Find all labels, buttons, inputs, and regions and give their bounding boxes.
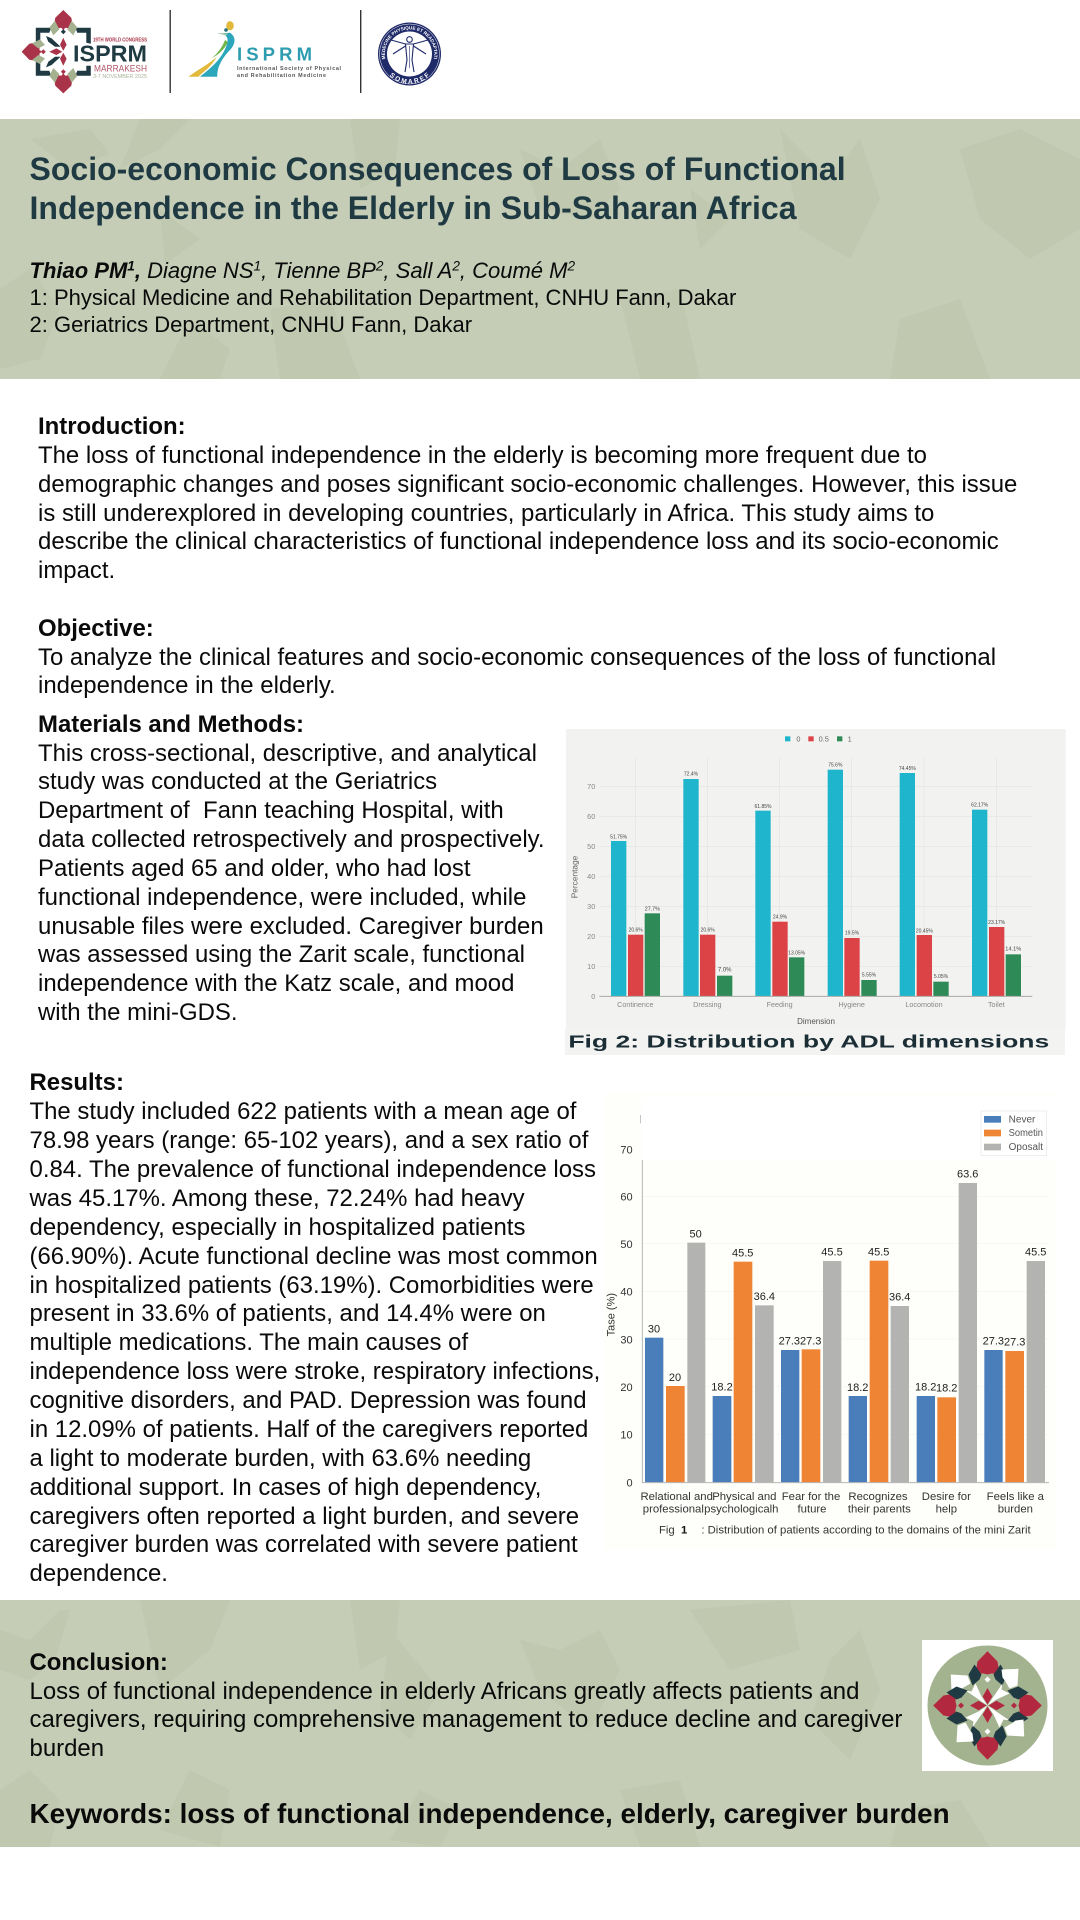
text block: conclusion: caregivers, requiring comprehensive management to reduce decline and caregiver	[30, 1706, 902, 1733]
category labels: Desire for	[922, 1491, 971, 1503]
bars: never	[645, 1338, 1003, 1482]
category labels: future	[798, 1504, 826, 1516]
y axis ticks: 20	[620, 1382, 633, 1394]
bar value labels: 18.2	[915, 1382, 936, 1394]
category labels: burden	[998, 1504, 1033, 1516]
bar value labels: 27.3	[1004, 1336, 1025, 1348]
bar value labels: 20	[669, 1372, 681, 1384]
text block: conclusion: Loss of functional independence in elderly Africans greatly affects patients and	[30, 1678, 859, 1705]
congress wordmark: ISPRM	[73, 41, 147, 67]
ISPRM society wordmark: ISPRM	[237, 44, 312, 65]
x axis title: Dimension	[797, 1017, 835, 1026]
chart: Fig 1 mini Zarit domains	[605, 1110, 1049, 1536]
y axis ticks: 0	[627, 1477, 633, 1489]
bar value labels: 19.5%	[845, 930, 860, 936]
category labels: professional	[643, 1504, 704, 1516]
text block: results: (66.90%). Acute functional decline was most common	[30, 1243, 598, 1270]
bar value labels: 27.7%	[645, 906, 660, 912]
x axis labels: Feeding	[767, 1000, 793, 1009]
text block: conclusion: Conclusion:	[30, 1649, 168, 1676]
bar value labels: 18.2	[847, 1382, 868, 1394]
bar value labels: 20.6%	[701, 928, 715, 934]
figure 1 caption: Fig	[659, 1524, 675, 1536]
authors and affiliations: 2: Geriatrics Department, CNHU Fann, Dakar	[30, 312, 472, 337]
text block: introduction: Introduction:	[38, 413, 186, 440]
title: Socio-economic Consequences of Loss of Functional	[30, 151, 846, 187]
text block: materials and methods: data collected retrospectively and prospectively.	[38, 826, 544, 853]
text block: introduction: The loss of functional independence in the elderly is becoming more frequent due to	[38, 442, 927, 469]
y axis ticks: 50	[620, 1239, 633, 1251]
text block: results: present in 33.6% of patients, and 14.4% were on	[30, 1300, 546, 1327]
bar value labels: 27.3	[800, 1335, 821, 1347]
bars: score 0	[611, 770, 987, 996]
text block: results	[30, 1069, 600, 1587]
text block: results: in 12.09% of patients. Half of the caregivers reported	[30, 1416, 588, 1443]
text block: results: a light to moderate burden, with 63.6% needing	[30, 1445, 531, 1472]
legend: 1	[848, 734, 852, 743]
bar value labels: 18.2	[711, 1382, 733, 1394]
text block: introduction	[38, 413, 1017, 584]
icon: SOMAREF seal	[378, 22, 441, 86]
y axis	[587, 782, 595, 1001]
category labels: help	[936, 1504, 957, 1516]
y axis title: Tase (%)	[605, 1293, 617, 1336]
text block: introduction: is still underexplored in developing countries, particularly in Africa. This study aims to	[38, 500, 934, 527]
bar value labels: 36.4	[889, 1292, 910, 1304]
panel: conclusion band	[0, 1600, 1080, 1847]
ISPRM society wordmark	[237, 44, 342, 79]
figure 1 caption: : Distribution of patients according to the domains of the mini Zarit	[701, 1524, 1031, 1536]
text block: results: dependence.	[30, 1560, 168, 1587]
bar value labels: 30	[648, 1324, 660, 1336]
y axis ticks: 10	[620, 1430, 633, 1442]
y axis ticks: 30	[620, 1334, 633, 1346]
logo bar	[22, 10, 441, 94]
congress wordmark: 3-7 NOVEMBER 2025	[93, 74, 147, 80]
text block: materials and methods	[38, 711, 544, 1026]
bar value labels: 7.0%	[718, 968, 732, 974]
text block: objective: Objective:	[38, 615, 154, 642]
legend: Sometin	[1009, 1128, 1043, 1139]
text block: objective	[38, 615, 996, 699]
x axis labels: Hygiene	[838, 1000, 865, 1009]
bar value labels: 20.6%	[629, 928, 643, 934]
y axis: 60	[587, 812, 595, 821]
bar value labels: 63.6	[957, 1169, 978, 1181]
text block: introduction: describe the clinical characteristics of functional independence loss and its socio-economic	[38, 528, 999, 555]
text block: materials and methods: This cross-sectional, descriptive, and analytical	[38, 740, 537, 767]
y axis: 40	[587, 872, 595, 881]
authors and affiliations	[30, 258, 736, 337]
bar value labels: 5.05%	[934, 974, 949, 980]
y axis ticks: 60	[620, 1192, 633, 1204]
bar value labels: 51.75%	[610, 834, 628, 840]
legend	[981, 1111, 1047, 1156]
bar value labels: 45.5	[1025, 1247, 1046, 1259]
divider	[360, 10, 361, 93]
category labels: Relational and	[640, 1491, 713, 1503]
text block: results: dependency, especially in hospitalized patients	[30, 1214, 525, 1241]
bar value labels: 13.05%	[788, 950, 806, 956]
authors and affiliations: 1: Physical Medicine and Rehabilitation Department, CNHU Fann, Dakar	[30, 285, 736, 310]
x axis labels: Locomotion	[905, 1000, 943, 1009]
y axis: 10	[587, 962, 595, 971]
congress wordmark: MARRAKESH	[94, 64, 147, 75]
bar value labels: 74.45%	[899, 766, 916, 772]
category labels: their parents	[848, 1504, 911, 1516]
bar value labels: 45.5	[868, 1247, 889, 1259]
text block: objective: To analyze the clinical features and socio-economic consequences of the loss of functional	[38, 644, 996, 671]
congress wordmark: 19TH WORLD CONGRESS	[93, 37, 147, 43]
bar value labels: 62.17%	[971, 803, 989, 809]
category labels: Recognizes	[848, 1491, 908, 1503]
figure 2 caption: Fig 2: Distribution by ADL dimensions	[568, 1031, 1049, 1051]
text block: results: The study included 622 patients with a mean age of	[30, 1098, 576, 1125]
text block: materials and methods: Materials and Methods:	[38, 711, 304, 738]
bar value labels: 72.4%	[684, 772, 699, 778]
text block: results: cognitive disorders, and PAD. Depression was found	[30, 1387, 587, 1414]
text block: materials and methods: Patients aged 65 and older, who had lost	[38, 855, 471, 882]
y axis: 30	[587, 902, 595, 911]
bar value labels: 50	[690, 1228, 702, 1240]
chart: Fig 2 ADL dimensions	[565, 729, 1066, 1055]
text block: results: caregivers often reported a light burden, and severe	[30, 1503, 579, 1530]
text block: results: Results:	[30, 1069, 124, 1096]
bar value labels: 27.3	[983, 1336, 1004, 1348]
bar value labels: 14.1%	[1005, 947, 1021, 953]
text block: materials and methods: with the mini-GDS.	[38, 999, 238, 1026]
icon: congress emblem	[22, 10, 91, 93]
bar value labels: 18.2	[936, 1383, 957, 1395]
text block: results: caregiver burden was correlated with severe patient	[30, 1531, 578, 1558]
congress wordmark	[73, 37, 147, 80]
bar value labels: 75.6%	[828, 762, 843, 768]
figure 1 caption: 1	[681, 1524, 687, 1536]
bar value labels: 36.4	[754, 1291, 775, 1303]
text block: materials and methods: independence with the Katz scale, and mood	[38, 970, 514, 997]
text block: materials and methods: unusable files were excluded. Caregiver burden	[38, 913, 544, 940]
text block: materials and methods: Department of Fann teaching Hospital, with	[38, 797, 504, 824]
bars: score 1	[645, 913, 1021, 996]
y axis: 50	[587, 842, 595, 851]
text block: conclusion	[30, 1649, 902, 1762]
divider	[170, 10, 171, 93]
category labels	[640, 1491, 1045, 1516]
y axis: 20	[587, 932, 595, 941]
bar value labels: 24.9%	[773, 915, 788, 921]
y axis title: Percentage	[570, 855, 580, 898]
x axis labels: Continence	[617, 1000, 654, 1009]
text block: results: 78.98 years (range: 65-102 years), and a sex ratio of	[30, 1127, 588, 1154]
bar value labels	[648, 1169, 1046, 1395]
text block: results: was 45.17%. Among these, 72.24% had heavy	[30, 1185, 525, 1212]
bar value labels: 23.17%	[988, 920, 1006, 926]
legend: 0	[796, 734, 800, 743]
authors and affiliations: Thiao PM1, Diagne NS1, Tienne BP2, Sall A2, Coumé M2	[30, 258, 575, 283]
text block: results: in hospitalized patients (63.19%). Comorbidities were	[30, 1272, 594, 1299]
text block: materials and methods: functional independence, were included, while	[38, 884, 526, 911]
category labels: Feels like a	[987, 1491, 1045, 1503]
panel: header band	[0, 119, 1080, 379]
keywords: Keywords: loss of functional independence, elderly, caregiver burden	[30, 1798, 950, 1828]
y axis ticks: 70	[620, 1144, 633, 1156]
x axis labels	[617, 1000, 1005, 1009]
bar value labels: 27.3	[779, 1335, 800, 1347]
category labels: Physical and	[712, 1491, 776, 1503]
text block: results: 0.84. The prevalence of functional independence loss	[30, 1156, 596, 1183]
y axis ticks	[620, 1144, 633, 1489]
legend: Never	[1009, 1115, 1036, 1126]
y axis ticks: 40	[620, 1287, 633, 1299]
bar value labels	[610, 762, 1021, 980]
icon: ISPRM swoosh figure	[188, 21, 234, 77]
text block: conclusion: burden	[30, 1735, 104, 1762]
legend: Oposalt	[1009, 1142, 1043, 1153]
icon: emblem badge	[922, 1640, 1053, 1771]
y axis: 70	[587, 782, 595, 791]
x axis labels: Dressing	[693, 1000, 722, 1009]
ISPRM society wordmark: and Rehabilitation Medicine	[237, 73, 326, 79]
bars: often	[687, 1183, 1045, 1482]
bar value labels: 45.5	[821, 1247, 843, 1259]
text block: materials and methods: was assessed using the Zarit scale, functional	[38, 941, 525, 968]
text block: results: multiple medications. The main causes of	[30, 1329, 468, 1356]
bars: score 0.5	[628, 922, 1004, 996]
text block: objective: independence in the elderly.	[38, 672, 336, 699]
bar value labels: 45.5	[732, 1247, 753, 1259]
ISPRM society wordmark: International Society of Physical	[237, 66, 342, 72]
title: Independence in the Elderly in Sub-Saharan Africa	[30, 190, 796, 226]
text block: introduction: demographic changes and poses significant socio-economic challenges. However, this issue	[38, 471, 1017, 498]
title	[30, 151, 846, 226]
text block: introduction: impact.	[38, 557, 115, 584]
category labels: Fear for the	[782, 1491, 840, 1503]
icon: SOMAREF seal: SOMAREF	[390, 72, 428, 84]
bar value labels: 5.55%	[862, 973, 877, 979]
legend	[785, 734, 852, 743]
text block: results: additional support. In cases of high dependency,	[30, 1474, 541, 1501]
category labels: psychologicalh	[704, 1504, 778, 1516]
bar value labels: 20.45%	[916, 928, 933, 934]
x axis labels: Toilet	[988, 1000, 1005, 1009]
y axis: 0	[591, 992, 595, 1001]
legend: 0.5	[819, 734, 829, 743]
bars: sometimes	[666, 1261, 1024, 1482]
text block: materials and methods: study was conducted at the Geriatrics	[38, 768, 437, 795]
bar value labels: 61.85%	[755, 804, 772, 810]
text block: results: independence loss were stroke, respiratory infections,	[30, 1358, 600, 1385]
